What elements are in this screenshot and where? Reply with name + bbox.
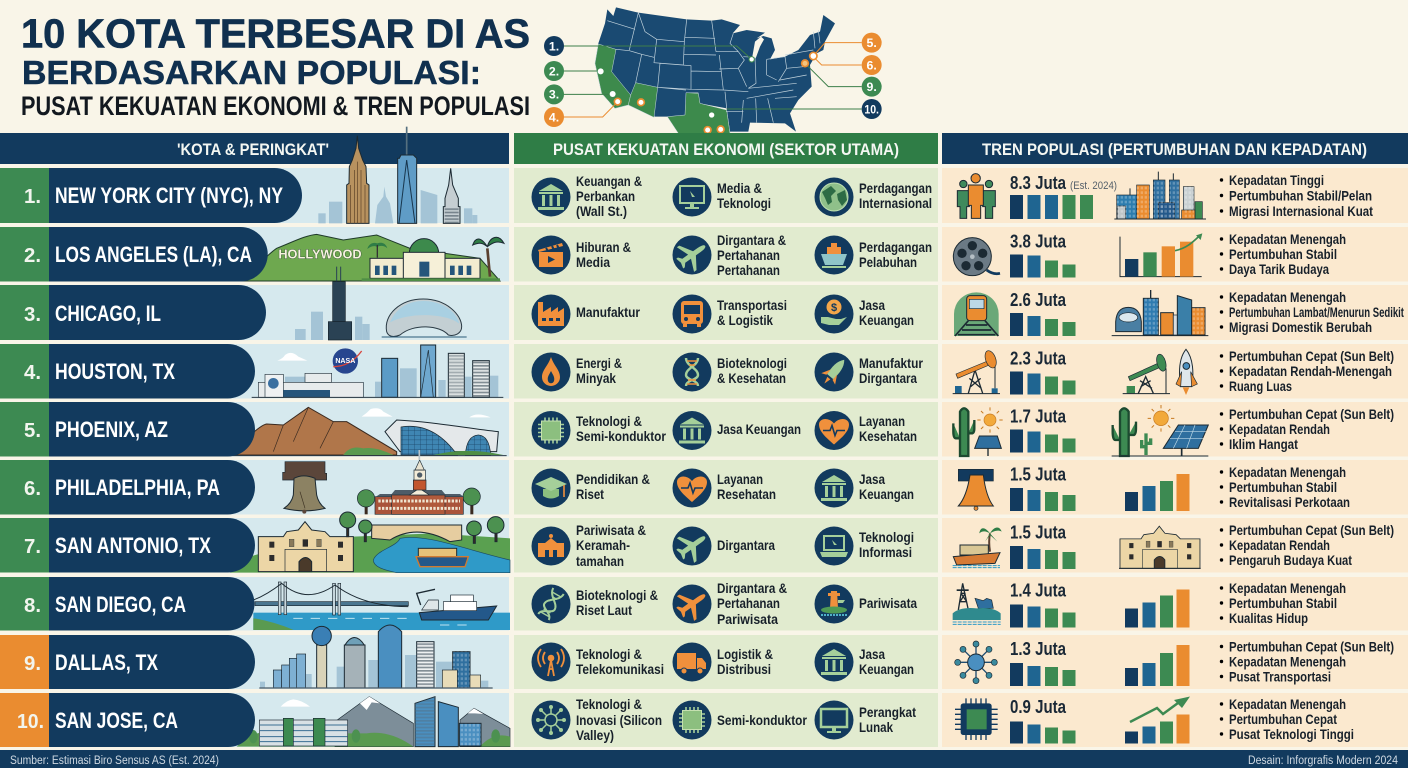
bullets (1220, 406, 1394, 452)
city name: PHOENIX, AZ (55, 417, 168, 442)
row 6 Philadelphia (0, 450, 509, 514)
rising bars chart (1125, 645, 1190, 686)
row 10 San Jose (0, 693, 510, 747)
icon: people (957, 174, 995, 218)
sectors row 5: Jasa Keuangan (717, 421, 801, 437)
icon: liberty bell (958, 469, 993, 510)
row 5 Phoenix (0, 402, 509, 456)
marker labels (544, 33, 882, 127)
mini bars (1010, 195, 1093, 219)
state borders (607, 13, 820, 123)
illustration: train and buildings (1112, 290, 1208, 336)
trend row 4 (942, 344, 1408, 398)
connector lines (563, 43, 862, 117)
bullets: Revitalisasi Perkotaan (1229, 494, 1350, 510)
sectors row 7: Dirgantara (717, 537, 775, 553)
sectors row 2: Media (576, 254, 610, 270)
trend row 6 (942, 460, 1408, 514)
sectors row 7: Pariwisata & (576, 522, 646, 538)
population: 1.7 Juta (1010, 406, 1067, 426)
trend row 1: (Est. 2024) (1070, 180, 1117, 192)
bullets: Kepadatan Menengah (1229, 289, 1346, 305)
sectors row 3: & Logistik (717, 312, 773, 328)
rising bars chart (1125, 590, 1190, 628)
row 9 Dallas (0, 625, 509, 689)
marker labels: 2. (549, 64, 559, 78)
column header: pusat kekuatan ekonomi: PUSAT KEKUATAN EKONOMI (SEKTOR UTAMA) (553, 140, 899, 159)
bullets: Kualitas Hidup (1229, 610, 1308, 626)
mini bars (1010, 430, 1076, 452)
bullets (1220, 172, 1373, 219)
sectors row 3: Jasa (859, 297, 885, 313)
sectors row 6: Pendidikan & (576, 471, 650, 487)
mini bars (1010, 604, 1076, 628)
marker labels: 1. (549, 39, 559, 53)
Dallas skyline (259, 625, 493, 688)
sectors row 7: Informasi (859, 544, 912, 560)
sectors row 10: Lunak (859, 719, 893, 735)
Liberty Bell and Independence Hall (283, 450, 480, 514)
sectors row 2 (514, 227, 938, 282)
bullets: Pertumbuhan Stabil (1229, 246, 1337, 262)
icon: oil pump (953, 349, 1000, 394)
sectors row 1: Media & (717, 180, 762, 196)
rising bars chart (1125, 474, 1190, 511)
trend row 7 (942, 518, 1408, 572)
bullets: Kepadatan Menengah (1229, 696, 1346, 712)
source note: Sumber: Estimasi Biro Sensus AS (Est. 2024) (10, 755, 219, 767)
mini bars (1010, 254, 1076, 278)
city name: SAN JOSE, CA (55, 708, 178, 733)
bullets (1220, 289, 1404, 335)
sectors row 3 (514, 285, 938, 340)
icon: tower and water (953, 583, 1001, 624)
row 3 Chicago (0, 267, 509, 340)
map outline (595, 7, 835, 132)
icon: film reel (953, 238, 1000, 276)
sectors row 1: Keuangan & (576, 173, 642, 189)
bullets: Pertumbuhan Cepat (1229, 711, 1337, 727)
column header: tren populasi: TREN POPULASI (PERTUMBUHAN DAN KEPADATAN) (982, 140, 1367, 159)
sectors row 3: Transportasi (717, 297, 787, 313)
title line 2: BERDASARKAN POPULASI: (22, 54, 481, 91)
bullets: Ruang Luas (1229, 378, 1292, 394)
illustration: cactus, sun and solar panel (1112, 405, 1208, 456)
sectors row 6: Riset (576, 486, 604, 502)
rank 5: 5. (24, 420, 41, 442)
sectors row 1: (Wall St.) (576, 203, 627, 219)
bridge and ship (253, 582, 510, 630)
mini bars (1010, 663, 1076, 686)
city name: SAN ANTONIO, TX (55, 533, 211, 558)
city name: LOS ANGELES (LA), CA (55, 242, 252, 267)
highlighted states California, Arizona, Texas (595, 44, 730, 133)
population: 1.4 Juta (1010, 580, 1067, 600)
marker labels: 3. (549, 88, 559, 102)
bullets (1220, 638, 1394, 684)
population: 3.8 Juta (1010, 230, 1067, 252)
bullets: Pengaruh Budaya Kuat (1229, 552, 1352, 568)
sectors row 10: Inovasi (Silicon (576, 712, 662, 728)
sectors row 9: Telekomunikasi (576, 661, 664, 677)
row 7 San Antonio (0, 512, 510, 573)
trend row 10 (942, 693, 1408, 747)
sectors row 7: Keramah- (576, 537, 630, 553)
city name: NEW YORK CITY (NYC), NY (55, 183, 283, 208)
sectors row 10: Valley) (576, 727, 614, 743)
bullets (1220, 522, 1394, 568)
population: 1.5 Juta (1010, 522, 1067, 542)
sectors row 5: Semi-konduktor (576, 428, 666, 444)
rank 6: 6. (24, 478, 41, 500)
trend row 9 (942, 635, 1408, 689)
Hollywood hill and observatory: HOLLYWOOD (278, 246, 362, 261)
sectors row 9: Distribusi (717, 661, 771, 677)
sectors row 1: Perdagangan (859, 180, 932, 196)
trend row 3 (942, 285, 1408, 340)
sectors row 6: Layanan (717, 471, 763, 487)
sectors row 1 (514, 168, 938, 223)
sectors row 10: Teknologi & (576, 696, 642, 712)
bullets (1220, 348, 1394, 394)
trend row 8 (942, 577, 1408, 630)
Alamo and River Walk (230, 512, 510, 573)
rank 2: 2. (24, 245, 41, 267)
bullets: Kepadatan Menengah (1229, 654, 1346, 670)
city name: HOUSTON, TX (55, 359, 175, 384)
Hollywood hill and observatory (233, 234, 504, 281)
sectors row 2: Pertahanan (717, 247, 780, 263)
bullets: Pertumbuhan Stabil (1229, 479, 1337, 495)
panel: economic sectors (514, 168, 938, 747)
city name: PHILADELPHIA, PA (55, 475, 220, 500)
sectors row 6: Keuangan (859, 486, 914, 502)
panel: population trends (942, 168, 1408, 747)
city name: CHICAGO, IL (55, 301, 161, 326)
mini bars (1010, 546, 1076, 569)
bullets: Kepadatan Rendah (1229, 421, 1330, 437)
rank 1: 1. (24, 186, 41, 208)
sectors row 10: Perangkat (859, 704, 916, 720)
design credit: Desain: Inforgrafis Modern 2024 (1248, 755, 1399, 767)
row 2 Los Angeles (0, 227, 509, 282)
sectors row 8: Pariwisata (717, 611, 778, 627)
sectors row 10 (514, 693, 938, 747)
title line 1: 10 KOTA TERBESAR DI AS (21, 10, 530, 56)
rank 8: 8. (24, 595, 41, 617)
NYC skyline (318, 127, 477, 223)
trend row 5 (942, 402, 1408, 456)
sectors row 4 (514, 344, 938, 398)
bullets (1220, 696, 1354, 742)
marker labels: 4. (549, 110, 559, 124)
population: 8.3 Juta (1010, 172, 1067, 193)
sectors row 3: Keuangan (859, 312, 914, 328)
sectors row 4: Manufaktur (859, 355, 923, 371)
sectors row 5: Teknologi & (576, 413, 642, 429)
sectors row 1: Perbankan (576, 188, 635, 204)
trend row 2 (942, 227, 1408, 282)
NASA and Houston skyline (252, 345, 503, 397)
mini bars (1010, 722, 1076, 744)
Camelback mountain and dome (228, 407, 507, 456)
sectors row 2: Pertahanan (717, 262, 780, 278)
bullets: Pertumbuhan Stabil/Pelan (1229, 188, 1372, 204)
sectors row 8 (514, 577, 938, 630)
Lake Michigan (752, 37, 764, 58)
mini bars (1010, 488, 1076, 511)
city name: SAN DIEGO, CA (55, 592, 186, 617)
sectors row 9: Keuangan (859, 661, 914, 677)
Silicon Valley campus and mountains (237, 697, 510, 747)
column header: kota & peringkat: 'KOTA & PERINGKAT' (177, 140, 329, 159)
sectors row 2: Pelabuhan (859, 254, 917, 270)
column header: pusat kekuatan ekonomi (514, 133, 938, 164)
illustration: pump and rocket (1123, 349, 1197, 395)
sectors row 9 (514, 635, 938, 689)
sectors row 6: Resehatan (717, 486, 776, 502)
bullets (1220, 580, 1346, 626)
bullets: Kepadatan Menengah (1229, 580, 1346, 596)
sectors row 9: Jasa (859, 646, 885, 662)
bullets: Iklim Hangat (1229, 436, 1298, 452)
rising bars with arrow (1125, 696, 1190, 744)
bullets (1220, 231, 1346, 277)
sectors row 2: Perdagangan (859, 239, 932, 255)
bullets: Pertumbuhan Stabil (1229, 595, 1337, 611)
icon: train (954, 292, 999, 336)
marker labels: 5. (867, 36, 877, 50)
population: 1.5 Juta (1010, 464, 1067, 484)
sectors row 2: Hiburan & (576, 239, 631, 255)
mini bars (1010, 313, 1076, 336)
sectors row 8: Pariwisata (859, 595, 917, 611)
sectors row 4: Minyak (576, 370, 616, 386)
bullets (1220, 464, 1350, 510)
population: 2.6 Juta (1010, 289, 1067, 310)
sectors row 1: Teknologi (717, 195, 771, 211)
icon: cactus and solar (953, 407, 1003, 456)
icon: transport network (955, 641, 997, 684)
marker labels: 10. (864, 102, 879, 116)
sectors row 8: Dirgantara & (717, 580, 787, 596)
NASA and Houston skyline: NASA (335, 356, 356, 365)
population: 0.9 Juta (1010, 696, 1067, 717)
sectors row 5: Layanan (859, 413, 905, 429)
sectors row 8: Pertahanan (717, 595, 780, 611)
sectors row 7: Teknologi (859, 529, 914, 545)
bullets: Migrasi Domestik Berubah (1229, 319, 1372, 335)
footer (0, 750, 1408, 768)
sectors row 3: Manufaktur (576, 304, 640, 320)
bullets: Pusat Transportasi (1229, 668, 1331, 684)
sectors row 8: Bioteknologi & (576, 587, 658, 603)
bullets: Kepadatan Rendah (1229, 537, 1330, 553)
panel: city column (0, 127, 510, 747)
sectors row 4: Energi & (576, 355, 622, 371)
rank 9: 9. (24, 653, 41, 675)
row 8 San Diego (0, 577, 510, 630)
title line 3: PUSAT KEKUATAN EKONOMI & TREN POPULASI (21, 91, 530, 121)
sectors row 7: tamahan (576, 553, 624, 569)
bullets: Daya Tarik Budaya (1229, 261, 1329, 277)
bullets: Kepadatan Tinggi (1229, 172, 1324, 188)
sectors row 7 (514, 518, 938, 572)
column header: kota & peringkat (0, 133, 509, 164)
icon: microchip (955, 698, 998, 740)
trend row 1 (942, 168, 1408, 223)
sectors row 1: Internasional (859, 195, 932, 211)
sectors row 6: Jasa (859, 471, 885, 487)
city dots (598, 52, 817, 133)
sectors row 4: & Kesehatan (717, 370, 786, 386)
sectors row 2: Dirgantara & (717, 232, 786, 248)
sectors row 6 (514, 460, 938, 514)
mini bars (1010, 372, 1076, 394)
row 1 New York (0, 127, 509, 223)
row 4 Houston (0, 344, 509, 398)
sectors row 10: Semi-konduktor (717, 712, 807, 728)
sectors row 4: Dirgantara (859, 370, 917, 386)
marker labels: 6. (867, 58, 877, 72)
bullets: Kepadatan Menengah (1229, 231, 1346, 247)
sectors row 9: Teknologi & (576, 646, 642, 662)
sectors row 9: Logistik & (717, 646, 773, 662)
illustration: city skyline (1114, 172, 1206, 219)
icon: river boat and palm (953, 527, 1002, 568)
population: 2.3 Juta (1010, 348, 1067, 368)
US map with city markers (544, 7, 882, 133)
sectors row 4: Bioteknologi (717, 355, 787, 371)
bullets: Kepadatan Menengah (1229, 464, 1346, 480)
rank 10: 10. (17, 711, 44, 733)
illustration: Alamo (1119, 526, 1201, 568)
city name: DALLAS, TX (55, 650, 158, 675)
title block (21, 10, 530, 121)
column header: tren populasi (942, 133, 1408, 164)
rank 7: 7. (24, 536, 41, 558)
marker labels: 9. (867, 80, 877, 94)
sectors row 8: Riset Laut (576, 602, 632, 618)
illustration: growth chart (1120, 233, 1202, 277)
bullets: Migrasi Internasional Kuat (1229, 203, 1373, 219)
rank 3: 3. (24, 304, 41, 326)
bullets: Pusat Teknologi Tinggi (1229, 726, 1354, 742)
sectors row 5: Kesehatan (859, 428, 917, 444)
population: 1.3 Juta (1010, 638, 1067, 659)
rank 4: 4. (24, 362, 41, 384)
sectors row 5 (514, 402, 938, 456)
Willis Tower and Cloud Gate (295, 267, 467, 340)
